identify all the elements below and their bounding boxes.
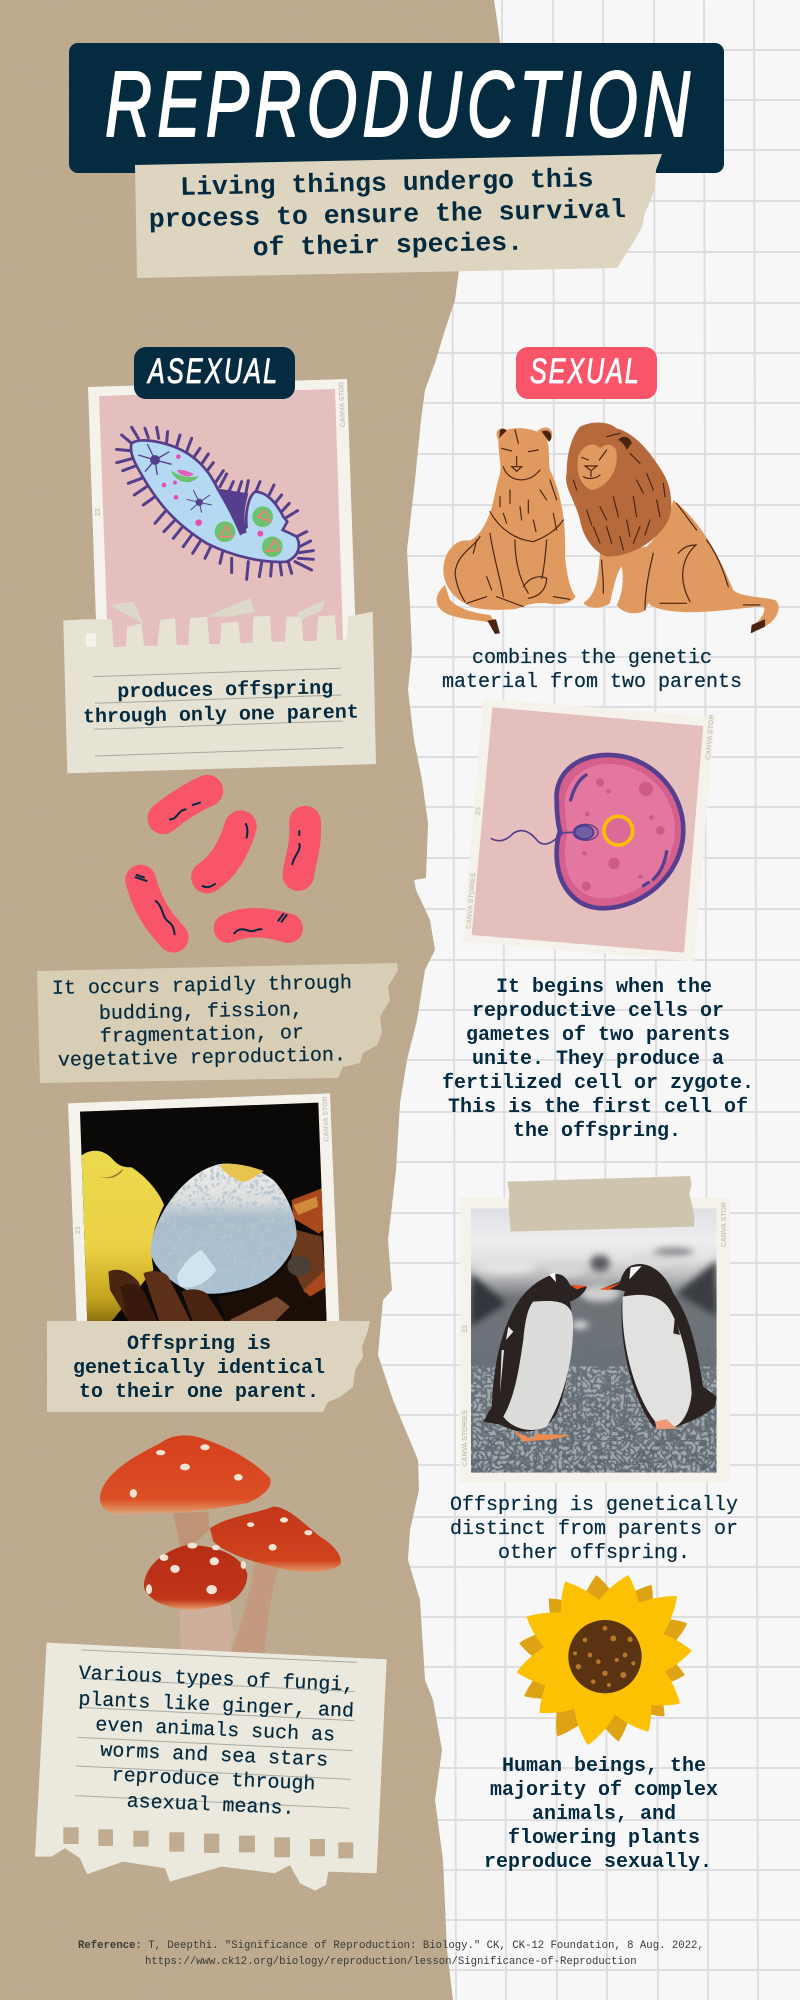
icon: lions xyxy=(437,422,779,634)
polaroid: penguins photo: CANVA STOR xyxy=(721,1202,728,1247)
text: it begins when: This is the first cell of xyxy=(448,1096,748,1119)
torn note: produces offspring xyxy=(63,598,376,773)
text: it begins when: the offspring. xyxy=(513,1120,681,1143)
text: combines the genetic material xyxy=(442,647,742,694)
torn tape: it occurs rapidly: It occurs rapidly through xyxy=(52,972,352,1001)
torn tape: it occurs rapidly xyxy=(37,963,398,1083)
torn note: various types of fungi: reproduce through xyxy=(111,1765,316,1796)
text: it begins when: It begins when the xyxy=(496,976,712,999)
reference citation: Reference: T, Deepthi. "Significance of Reproduction: Biology." CK, CK-12 Foundation, 8 Aug. 2022, xyxy=(78,1940,704,1952)
text: combines the genetic material: combines the genetic xyxy=(472,647,712,670)
torn note: various types of fungi: plants like ginger, and xyxy=(78,1689,354,1724)
text: offspring genetically distinct xyxy=(450,1494,738,1565)
icon: bacteria xyxy=(136,791,305,937)
ASEXUAL badge xyxy=(134,347,295,399)
polaroid: paramecium dividing: CANVA STOR xyxy=(338,382,347,427)
polaroid: moldy lemon photo: 23 xyxy=(75,1226,82,1234)
text: human beings: animals, and xyxy=(532,1803,676,1826)
polaroid: sperm and egg: CANVA STORIES xyxy=(466,872,478,929)
subtitle torn tape: process to ensure the survival xyxy=(149,195,626,235)
subtitle torn tape: of their species. xyxy=(252,228,523,263)
polaroid: penguins photo xyxy=(459,1176,730,1483)
polaroid: paramecium dividing: 23 xyxy=(95,508,102,516)
text: human beings xyxy=(484,1755,718,1874)
torn note: produces offspring: through only one parent xyxy=(83,702,359,729)
text: human beings: majority of complex xyxy=(490,1779,718,1802)
polaroid: paramecium dividing xyxy=(88,379,356,650)
text: human beings: Human beings, the xyxy=(502,1755,706,1778)
icon: paramecium xyxy=(117,427,313,579)
text: it begins when: gametes of two parents xyxy=(466,1024,730,1047)
photo: red mushrooms xyxy=(100,1435,341,1663)
polaroid: moldy lemon photo: CANVA STOR xyxy=(322,1096,331,1142)
torn note: various types of fungi: Various types of fungi, xyxy=(78,1663,355,1698)
text: it begins when xyxy=(442,976,754,1143)
tape on penguin photo xyxy=(507,1176,695,1232)
polaroid: penguins photo: CANVA STORIES xyxy=(462,1410,469,1467)
polaroid: penguins photo: 23 xyxy=(462,1325,469,1333)
torn tape: it occurs rapidly: fragmentation, or xyxy=(100,1022,304,1049)
SEXUAL badge: SEXUAL xyxy=(530,352,641,391)
torn note: produces offspring: produces offspring xyxy=(117,677,333,704)
icon: egg cell xyxy=(491,755,683,908)
title banner: REPRODUCTION xyxy=(105,53,695,157)
left penguin xyxy=(483,1273,587,1442)
male lion xyxy=(566,422,779,633)
torn tape: offspring identical: to their one parent. xyxy=(79,1381,319,1404)
torn note: various types of fungi: worms and sea stars xyxy=(100,1740,328,1773)
torn kraft paper background xyxy=(0,0,500,2000)
SEXUAL badge xyxy=(516,347,657,399)
text: it begins when: reproductive cells or xyxy=(472,1000,724,1023)
text: human beings: flowering plants xyxy=(508,1827,700,1850)
text: offspring genetically distinct: distinct from parents or xyxy=(450,1518,738,1541)
text: it begins when: unite. They produce a xyxy=(472,1048,724,1071)
torn note: various types of fungi: asexual means. xyxy=(126,1791,295,1821)
torn tape: offspring identical: genetically identical xyxy=(73,1357,325,1380)
polaroid: sperm and egg xyxy=(462,698,716,962)
torn tape: offspring identical: Offspring is xyxy=(127,1333,271,1356)
torn tape: it occurs rapidly: vegetative reproduction. xyxy=(58,1044,346,1073)
right penguin xyxy=(599,1264,717,1429)
text: offspring genetically distinct: other offspring. xyxy=(498,1542,690,1565)
polaroid: moldy lemon photo xyxy=(68,1093,339,1323)
ASEXUAL badge: ASEXUAL xyxy=(146,352,279,391)
text: combines the genetic material: material from two parents xyxy=(442,671,742,694)
subtitle torn tape xyxy=(135,154,662,278)
lioness xyxy=(437,427,576,634)
polaroid: sperm and egg: 23 xyxy=(475,807,483,815)
reference citation xyxy=(78,1940,704,1968)
torn note: various types of fungi xyxy=(35,1643,387,1891)
reference citation: https://www.ck12.org/biology/reproduction/lesson/Significance-of-Reproduction xyxy=(145,1956,637,1968)
text: offspring genetically distinct: Offspring is genetically xyxy=(450,1494,738,1517)
icon: sunflower xyxy=(512,1568,695,1750)
polaroid: sperm and egg: CANVA STOR xyxy=(705,714,716,760)
subtitle torn tape: Living things undergo this xyxy=(180,164,594,203)
text: human beings: reproduce sexually. xyxy=(484,1851,712,1874)
text: it begins when: fertilized cell or zygote. xyxy=(442,1072,754,1095)
torn tape: it occurs rapidly: budding, fission, xyxy=(99,999,303,1026)
torn tape: offspring identical xyxy=(47,1321,370,1412)
torn note: various types of fungi: even animals such as xyxy=(95,1714,335,1748)
